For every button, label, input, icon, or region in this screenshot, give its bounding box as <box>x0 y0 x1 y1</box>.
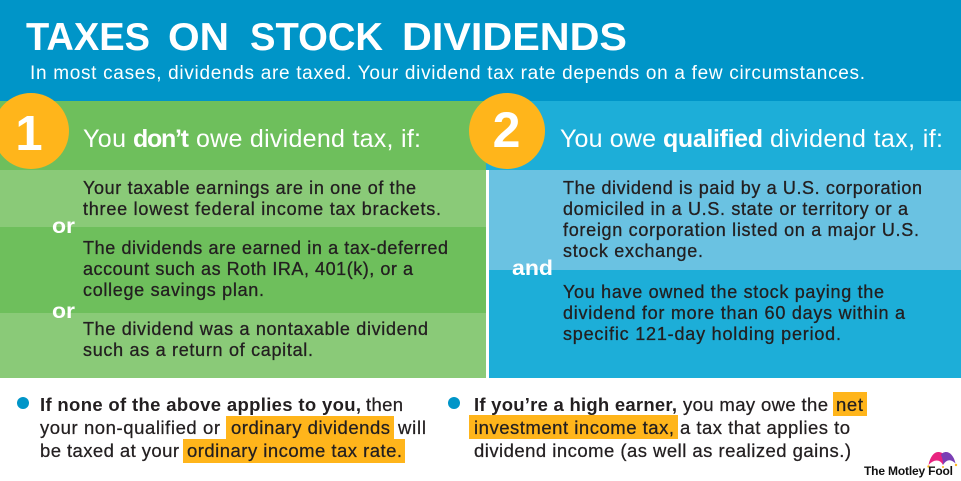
condition: nontaxable dividend: such as a return of capital. <box>83 340 313 360</box>
panel: qualified dividend tax <box>486 101 961 378</box>
panel heading: owe dividend tax, if: <box>196 125 421 153</box>
note: ordinary dividends: ordinary dividends <box>231 417 390 438</box>
icon: jester hat <box>927 452 957 468</box>
note: ordinary dividends: ordinary income tax rate. <box>187 440 402 461</box>
bullet <box>17 397 29 409</box>
condition: holding period <box>563 282 906 344</box>
note: high earner <box>448 392 867 461</box>
icon: number 2 badge: 2 <box>493 102 520 158</box>
condition: U.S. corporation: foreign corporation listed on a major U.S. <box>563 220 919 240</box>
condition: low tax bracket: Your taxable earnings are in one of the <box>83 178 416 198</box>
condition: tax-deferred account: college savings plan. <box>83 280 264 300</box>
panel heading: You owe <box>560 125 656 153</box>
condition: tax-deferred account: account such as Roth IRA, 401(k), or a <box>83 259 414 279</box>
condition: nontaxable dividend <box>83 319 428 360</box>
bullet <box>448 397 460 409</box>
note: high earner: you may owe the <box>683 394 828 415</box>
title: STOCK <box>250 16 383 59</box>
title: TAXES <box>26 16 150 59</box>
title: DIVIDENDS <box>402 16 627 59</box>
condition: holding period: dividend for more than 60 days within a <box>563 303 906 323</box>
condition: U.S. corporation: stock exchange. <box>563 241 703 261</box>
panel heading: dividend tax, if: <box>770 125 943 153</box>
condition: holding period: You have owned the stock paying the <box>563 282 884 302</box>
connector: or: or <box>52 300 75 323</box>
note: ordinary dividends: then <box>366 394 403 415</box>
condition: low tax bracket <box>83 178 441 219</box>
panel heading <box>560 125 943 153</box>
icon: number 2 badge <box>469 93 545 169</box>
subtitle: In most cases, dividends are taxed. Your dividend tax rate depends on a few circumstances. <box>30 63 865 84</box>
note: high earner: a tax that applies to <box>680 417 850 438</box>
icon: number 1 badge <box>0 93 69 169</box>
title <box>26 16 627 59</box>
condition: nontaxable dividend: The dividend was a nontaxable dividend <box>83 319 428 339</box>
note: high earner: investment income tax, <box>474 417 674 438</box>
logo: The Motley Fool: The Motley Fool <box>864 464 953 478</box>
title: ON <box>168 16 229 59</box>
note: ordinary dividends: your non-qualified or <box>40 417 220 438</box>
condition: U.S. corporation: The dividend is paid by a U.S. corporation <box>563 178 922 198</box>
panel heading: qualified <box>663 125 763 153</box>
note: ordinary dividends: be taxed at your <box>40 440 179 461</box>
panel heading <box>83 125 421 153</box>
logo: The Motley Fool <box>864 452 957 478</box>
note: ordinary dividends <box>17 394 426 463</box>
panel heading: You <box>83 125 126 153</box>
note: high earner: If you’re a high earner, <box>474 394 677 415</box>
condition: tax-deferred account <box>83 238 448 300</box>
condition: U.S. corporation <box>563 178 922 261</box>
condition: U.S. corporation: domiciled in a U.S. state or territory or a <box>563 199 909 219</box>
connector: and: and <box>512 257 553 280</box>
panel: no dividend tax <box>0 101 486 378</box>
panel heading: don’t <box>133 125 190 153</box>
note: ordinary dividends: will <box>397 417 426 438</box>
header banner <box>0 0 961 101</box>
condition: low tax bracket: three lowest federal income tax brackets. <box>83 199 441 219</box>
icon: number 1 badge: 1 <box>15 107 43 161</box>
note: high earner: dividend income (as well as realized gains.) <box>474 440 851 461</box>
condition: holding period: specific 121-day holding period. <box>563 324 841 344</box>
connector: or: or <box>52 215 75 238</box>
note: high earner: net <box>836 394 863 415</box>
note: ordinary dividends: If none of the above applies to you, <box>40 394 361 415</box>
condition: tax-deferred account: The dividends are earned in a tax-deferred <box>83 238 448 258</box>
